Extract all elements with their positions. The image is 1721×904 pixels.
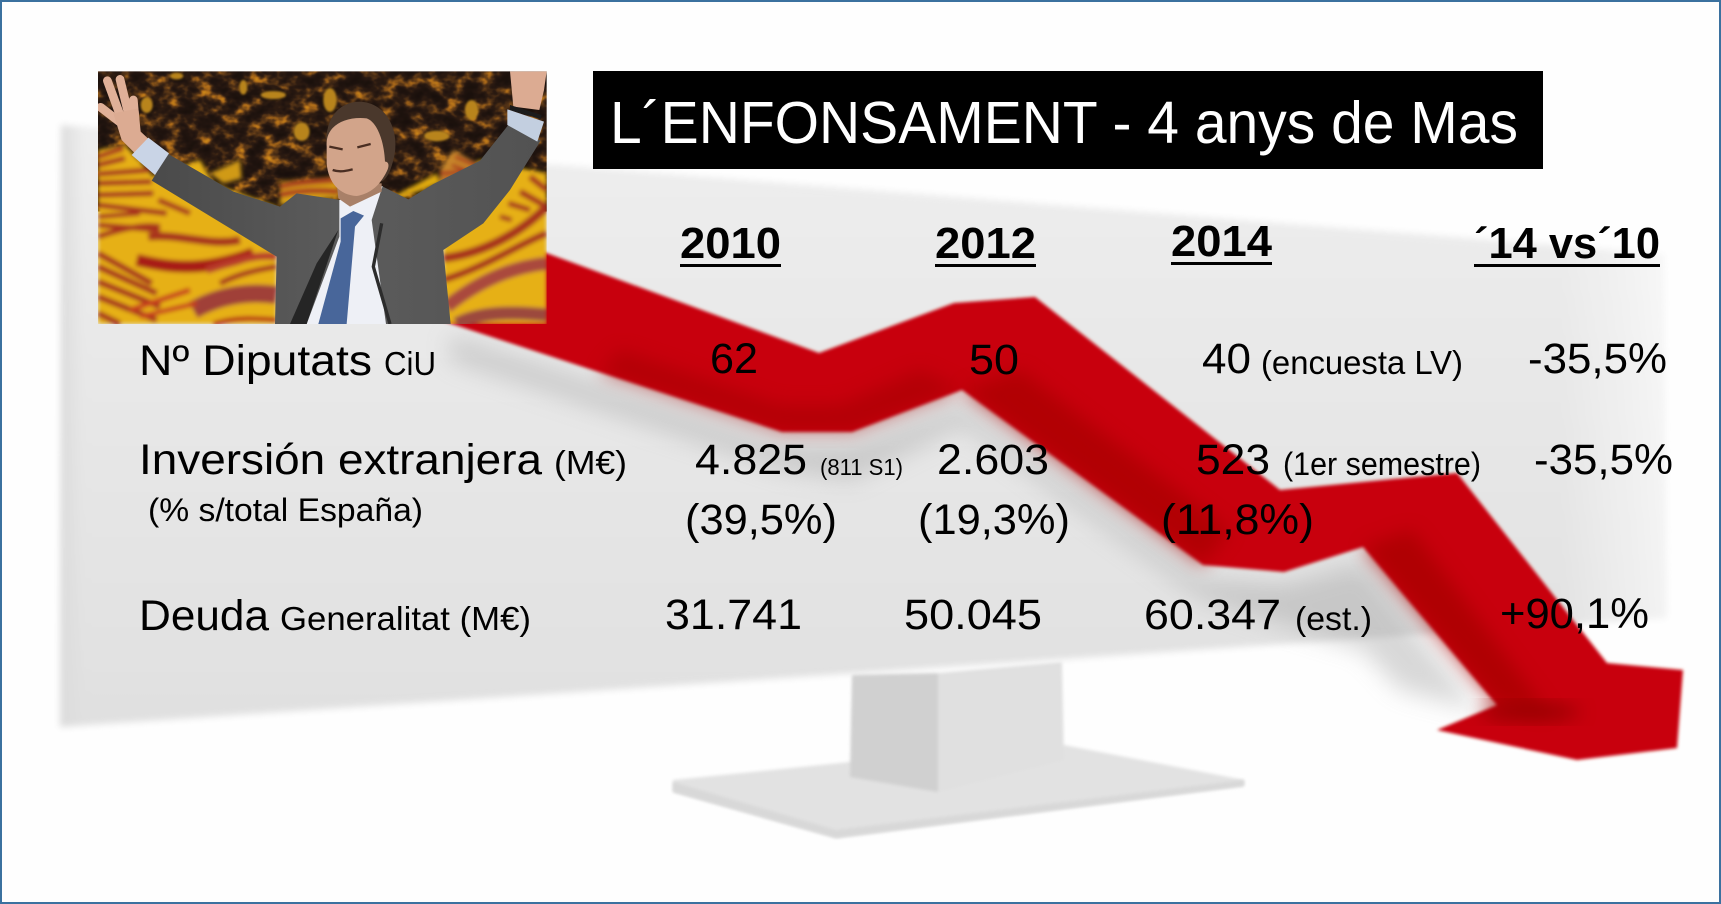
right hand xyxy=(507,71,547,142)
head xyxy=(327,118,388,196)
value 2012: 2.603 xyxy=(937,436,1049,484)
right cuff xyxy=(507,109,544,142)
chart monitor illustration xyxy=(60,125,1667,838)
row unit: (M€) xyxy=(554,444,627,481)
value 2014: 40 xyxy=(1202,335,1251,383)
share 2012: (19,3%) xyxy=(918,496,1070,544)
arrow shadow xyxy=(450,335,1480,710)
photo: Artur Mas with raised arms in front of flags xyxy=(98,71,547,324)
suit jacket xyxy=(152,125,541,324)
base front edge xyxy=(673,780,1244,838)
left cuff xyxy=(132,138,169,175)
share 2014: (11,8%) xyxy=(1161,496,1314,544)
change: +90,1% xyxy=(1500,590,1649,638)
row label: Nº Diputats xyxy=(139,337,372,385)
value 2014: 523 xyxy=(1196,436,1270,484)
row unit: CiU xyxy=(384,345,436,382)
row: Nº Diputats CiU xyxy=(139,335,1667,385)
value 2012: 50.045 xyxy=(904,591,1042,639)
title banner: L´ENFONSAMENT - 4 anys de Mas xyxy=(610,90,1518,156)
header 2010: 2010 xyxy=(680,219,781,268)
hair xyxy=(326,102,395,182)
value 2012: 50 xyxy=(969,336,1019,384)
note 2014: (1er semestre) xyxy=(1283,446,1481,482)
shirt xyxy=(307,186,386,324)
note 2010: (811 S1) xyxy=(820,454,903,480)
column headers xyxy=(680,217,1660,268)
value 2010: 4.825 xyxy=(695,436,807,484)
header 2012: 2012 xyxy=(935,219,1036,268)
jacket lapel shadow xyxy=(373,223,390,324)
row label: Deuda xyxy=(139,592,269,640)
watch band xyxy=(510,105,542,119)
red falling arrow xyxy=(440,236,1683,760)
row: Deuda Generalitat xyxy=(139,590,1649,640)
crowd background xyxy=(98,71,547,211)
row: Inversión extranjera xyxy=(139,436,1673,544)
note 2014: (encuesta LV) xyxy=(1261,344,1463,381)
row unit: Generalitat (M€) xyxy=(280,600,531,637)
monitor stand base xyxy=(673,745,1244,838)
change: -35,5% xyxy=(1528,335,1667,383)
neck xyxy=(337,183,382,207)
row sublabel: (% s/total España) xyxy=(148,492,423,528)
header 14 vs 10: ´14 vs´10 xyxy=(1474,219,1660,268)
eyes and mouth xyxy=(329,144,371,171)
value 2010: 31.741 xyxy=(665,591,802,639)
title banner xyxy=(593,71,1543,169)
waving flags xyxy=(98,145,547,324)
monitor stand neck xyxy=(850,662,1064,792)
row label: Inversión extranjera xyxy=(139,436,542,484)
header 2014: 2014 xyxy=(1171,217,1273,266)
note 2014: (est.) xyxy=(1295,600,1372,637)
value 2010: 62 xyxy=(710,335,758,383)
change: -35,5% xyxy=(1534,436,1673,484)
tie xyxy=(318,211,364,324)
value 2014: 60.347 xyxy=(1144,591,1281,639)
monitor panel xyxy=(60,125,1667,727)
left hand xyxy=(101,79,169,175)
share 2010: (39,5%) xyxy=(685,496,837,544)
